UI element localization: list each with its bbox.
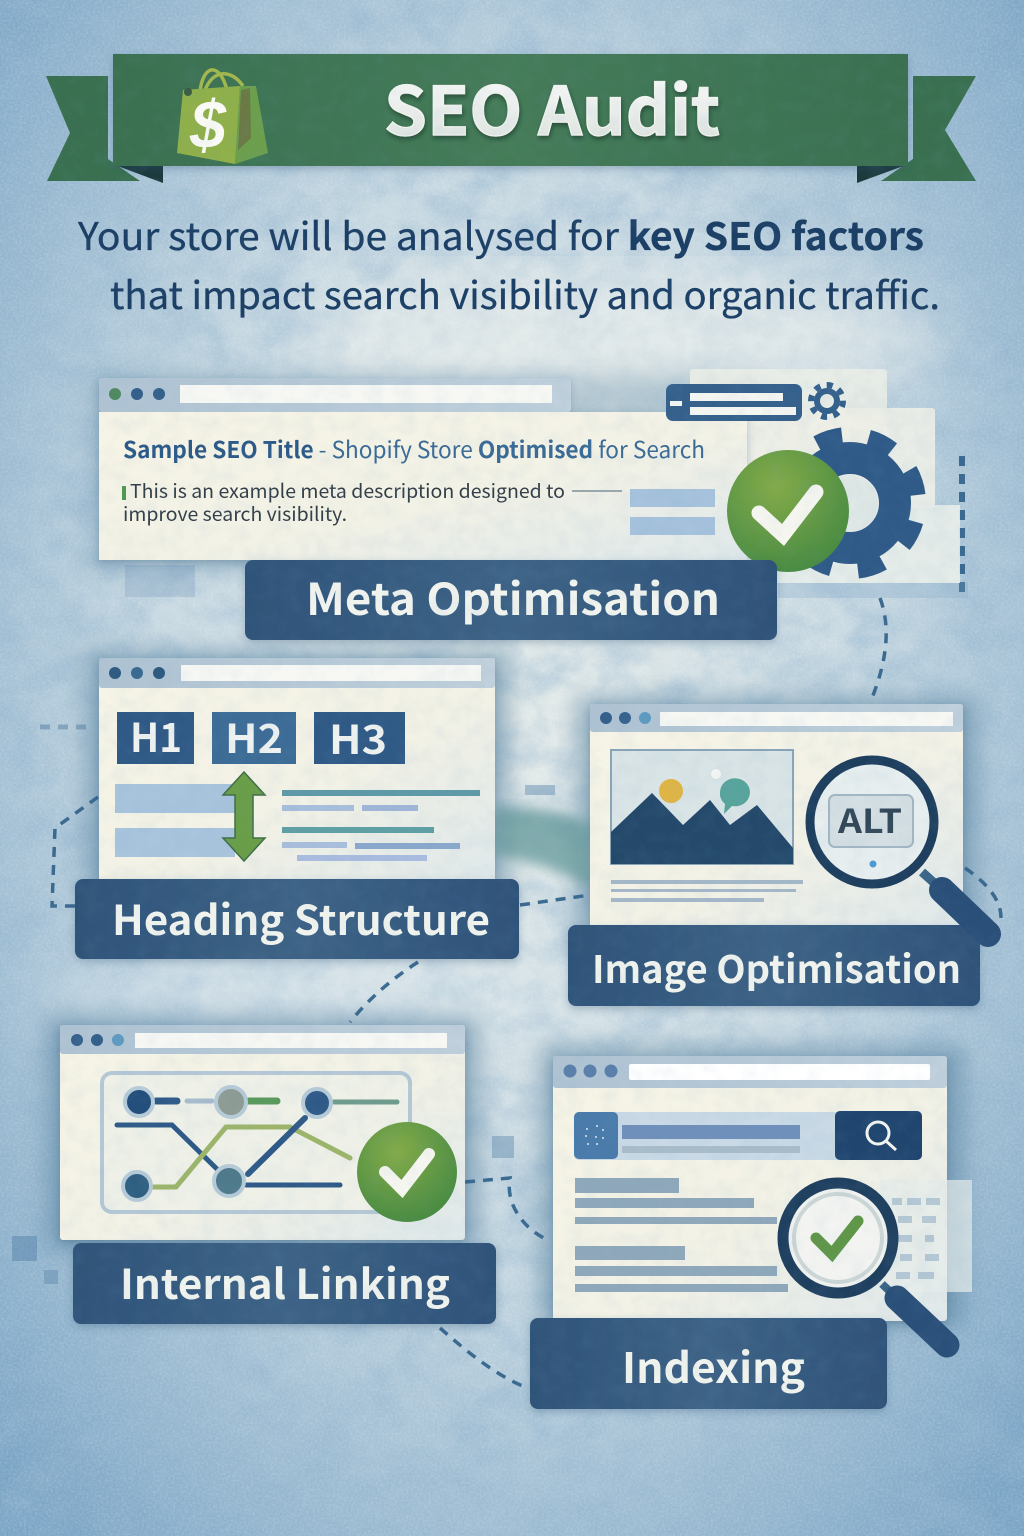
panel: internal linking [60,1025,496,1324]
label: meta optimisation: Meta Optimisation [306,564,720,628]
panel: indexing [530,1056,972,1409]
banner right tail [881,76,976,181]
panel: image optimisation [568,704,988,1006]
icon: shopping bag [177,70,268,164]
meta title sample: Sample SEO Title - Shopify Store Optimised for Search [123,431,705,465]
icon: large gear [759,412,941,594]
label: meta optimisation [245,560,777,640]
label: image optimisation: Image Optimisation [592,939,961,994]
panel: meta optimisation [99,369,960,640]
meta description sample: This is an example meta description designed to [130,477,565,504]
intro text: that impact search visibility and organic traffic. [110,265,940,320]
caption lines [611,880,803,902]
content blocks [115,784,235,857]
heading window [99,658,495,882]
picture placeholder [611,750,793,864]
back windows [690,369,960,583]
pixel fade [880,1180,972,1292]
meta description sample [123,477,565,527]
label: heading structure [75,879,519,959]
label: heading structure: Heading Structure [112,887,490,947]
heading tags: H1 [130,706,182,764]
icon: magnifier ALT: ALT [837,795,902,843]
banner body [113,54,908,166]
link diagram [102,1073,410,1212]
result lines [575,1178,788,1292]
icon: check badge [357,1122,457,1222]
label: internal linking: Internal Linking [120,1251,450,1311]
meta description sample: improve search visibility. [123,500,347,527]
intro text: Your store will be analysed for key SEO factors [77,206,924,261]
heading tags: H3 [329,708,387,766]
icon: magnifier check [783,1183,947,1345]
search tag pill [666,384,802,421]
title: SEO Audit [384,58,720,155]
image window [590,704,963,928]
intro text [77,206,940,320]
meta window [99,378,747,560]
icon: double arrow [223,772,265,861]
icon: small gear [811,385,843,417]
heading tags: H2 [225,707,283,765]
decorative pixels [12,565,968,1284]
label: indexing: Indexing [622,1335,805,1396]
text lines [282,790,480,861]
banner folds [115,165,906,183]
dashed connectors [40,456,1001,1387]
indexing window [553,1056,947,1321]
label: indexing [530,1318,887,1409]
icon: magnifier ALT [810,760,988,934]
banner left tail [46,76,140,181]
linking window [60,1025,465,1240]
icon: check badge [727,450,849,572]
placeholder bars [122,486,715,535]
panel: heading structure [75,658,519,959]
icon: shopping bag: $ [189,87,227,163]
banner [46,54,976,183]
search bar [574,1111,922,1160]
label: internal linking [73,1243,496,1324]
heading tags [117,706,405,766]
label: image optimisation [568,925,980,1006]
